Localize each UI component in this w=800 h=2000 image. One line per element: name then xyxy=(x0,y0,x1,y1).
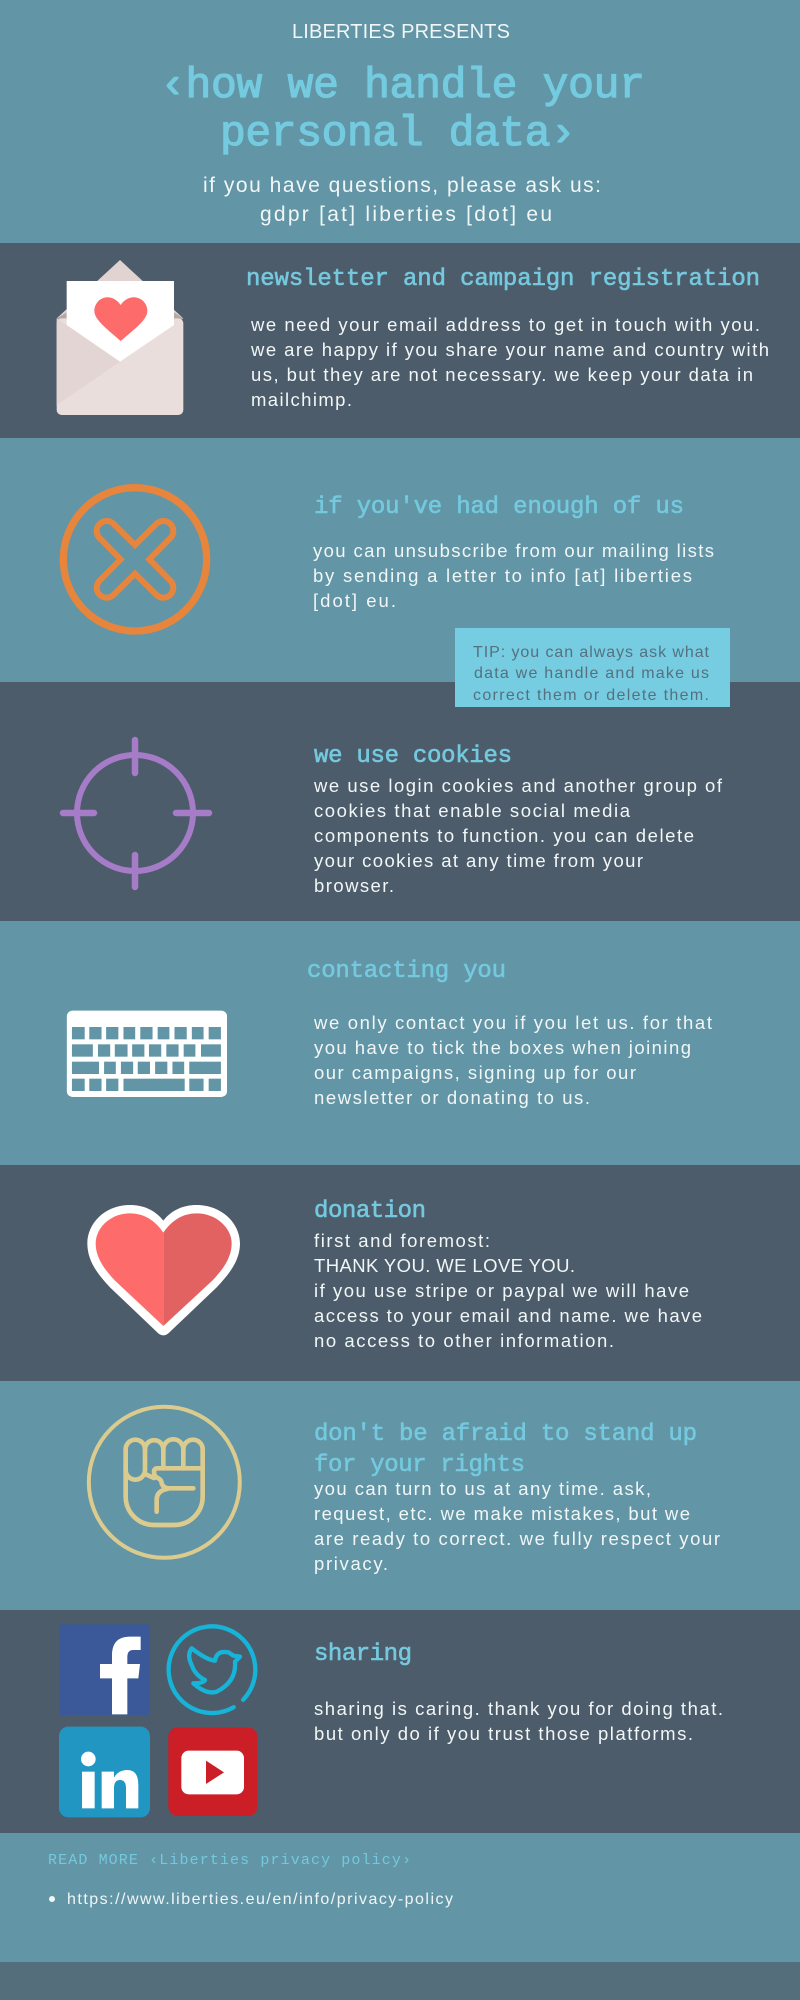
body text: mailchimp. xyxy=(251,389,352,410)
body text: we need your email address to get in touch with you. xyxy=(250,314,760,335)
callout: tip xyxy=(455,628,730,707)
callout: tip: data we handle and make us xyxy=(474,665,709,682)
title: personal data› xyxy=(220,109,576,158)
icon: orange circled x xyxy=(63,488,207,631)
heading: contacting you xyxy=(307,958,506,985)
body text: we only contact you if you let us. for that xyxy=(313,1012,712,1033)
body text: by sending a letter to info [at] liberties xyxy=(313,565,692,586)
body text: components to function. you can delete xyxy=(314,825,694,846)
body text: newsletter or donating to us. xyxy=(314,1087,590,1108)
icon: purple crosshair xyxy=(63,740,209,887)
icon: linkedin xyxy=(59,1727,150,1817)
heading: sharing xyxy=(314,1641,412,1668)
body text xyxy=(313,775,723,896)
contact text xyxy=(203,174,601,226)
title xyxy=(160,61,645,158)
body text: we are happy if you share your name and country with xyxy=(250,339,769,360)
icon: twitter xyxy=(169,1626,255,1713)
presenter label: LIBERTIES PRESENTS xyxy=(292,21,510,43)
body text: we use login cookies and another group of xyxy=(313,775,723,796)
body text xyxy=(314,1698,723,1744)
body text: if you use stripe or paypal we will have xyxy=(314,1280,689,1301)
body text: you can turn to us at any time. ask, xyxy=(314,1478,651,1499)
body text xyxy=(314,1230,702,1351)
body text: no access to other information. xyxy=(314,1330,614,1351)
body text: THANK YOU. WE LOVE YOU. xyxy=(314,1255,575,1276)
icon: facebook xyxy=(59,1624,150,1715)
body text: cookies that enable social media xyxy=(314,800,631,821)
body text: our campaigns, signing up for our xyxy=(314,1062,636,1083)
heading xyxy=(314,1421,697,1479)
body text xyxy=(314,1478,720,1574)
body text: browser. xyxy=(314,875,394,896)
body text: request, etc. we make mistakes, but we xyxy=(314,1503,690,1524)
contact text: gdpr [at] liberties [dot] eu xyxy=(260,203,552,226)
heading: we use cookies xyxy=(314,743,512,770)
icon: youtube xyxy=(168,1727,257,1816)
panel: newsletter xyxy=(57,260,769,415)
title: ‹how we handle your xyxy=(160,61,645,110)
read more heading: READ MORE ‹Liberties privacy policy› xyxy=(48,1852,411,1869)
heading: newsletter and campaign registration xyxy=(246,266,760,293)
heading: donation xyxy=(314,1198,426,1225)
body text: us, but they are not necessary. we keep your data in xyxy=(251,364,753,385)
body text: your cookies at any time from your xyxy=(314,850,643,871)
panel: cookies xyxy=(63,740,723,896)
body text: access to your email and name. we have xyxy=(314,1305,702,1326)
heading: for your rights xyxy=(314,1452,525,1479)
bullet link: https://www.liberties.eu/en/info/privacy-policy xyxy=(67,1891,453,1908)
body text xyxy=(313,1012,712,1108)
callout: tip: TIP: you can always ask what xyxy=(473,644,710,661)
header panel xyxy=(160,21,645,226)
icons: social media xyxy=(59,1624,257,1817)
callout: tip: correct them or delete them. xyxy=(473,687,709,704)
panel: contacting xyxy=(67,958,712,1108)
icon: envelope with heart xyxy=(57,260,183,415)
panel: unsubscribe xyxy=(63,488,714,631)
body text xyxy=(313,540,714,611)
body text: you can unsubscribe from our mailing lists xyxy=(313,540,714,561)
panel: sharing xyxy=(59,1624,723,1817)
body text: privacy. xyxy=(314,1553,388,1574)
panel: stand up xyxy=(89,1407,720,1574)
heading: don't be afraid to stand up xyxy=(314,1421,697,1448)
panel: read more xyxy=(48,1852,453,1908)
body text: [dot] eu. xyxy=(313,590,396,611)
body text: but only do if you trust those platforms. xyxy=(314,1723,693,1744)
icon: raised fist xyxy=(89,1407,240,1558)
panel: donation xyxy=(87,1198,702,1351)
body text xyxy=(250,314,769,410)
body text: sharing is caring. thank you for doing that. xyxy=(314,1698,723,1719)
heading: if you've had enough of us xyxy=(314,494,684,521)
icon: heart xyxy=(87,1205,240,1335)
icon: keyboard xyxy=(67,1011,227,1097)
body text: are ready to correct. we fully respect your xyxy=(314,1528,720,1549)
body text: first and foremost: xyxy=(314,1230,490,1251)
body text: you have to tick the boxes when joining xyxy=(314,1037,691,1058)
contact text: if you have questions, please ask us: xyxy=(203,174,601,197)
